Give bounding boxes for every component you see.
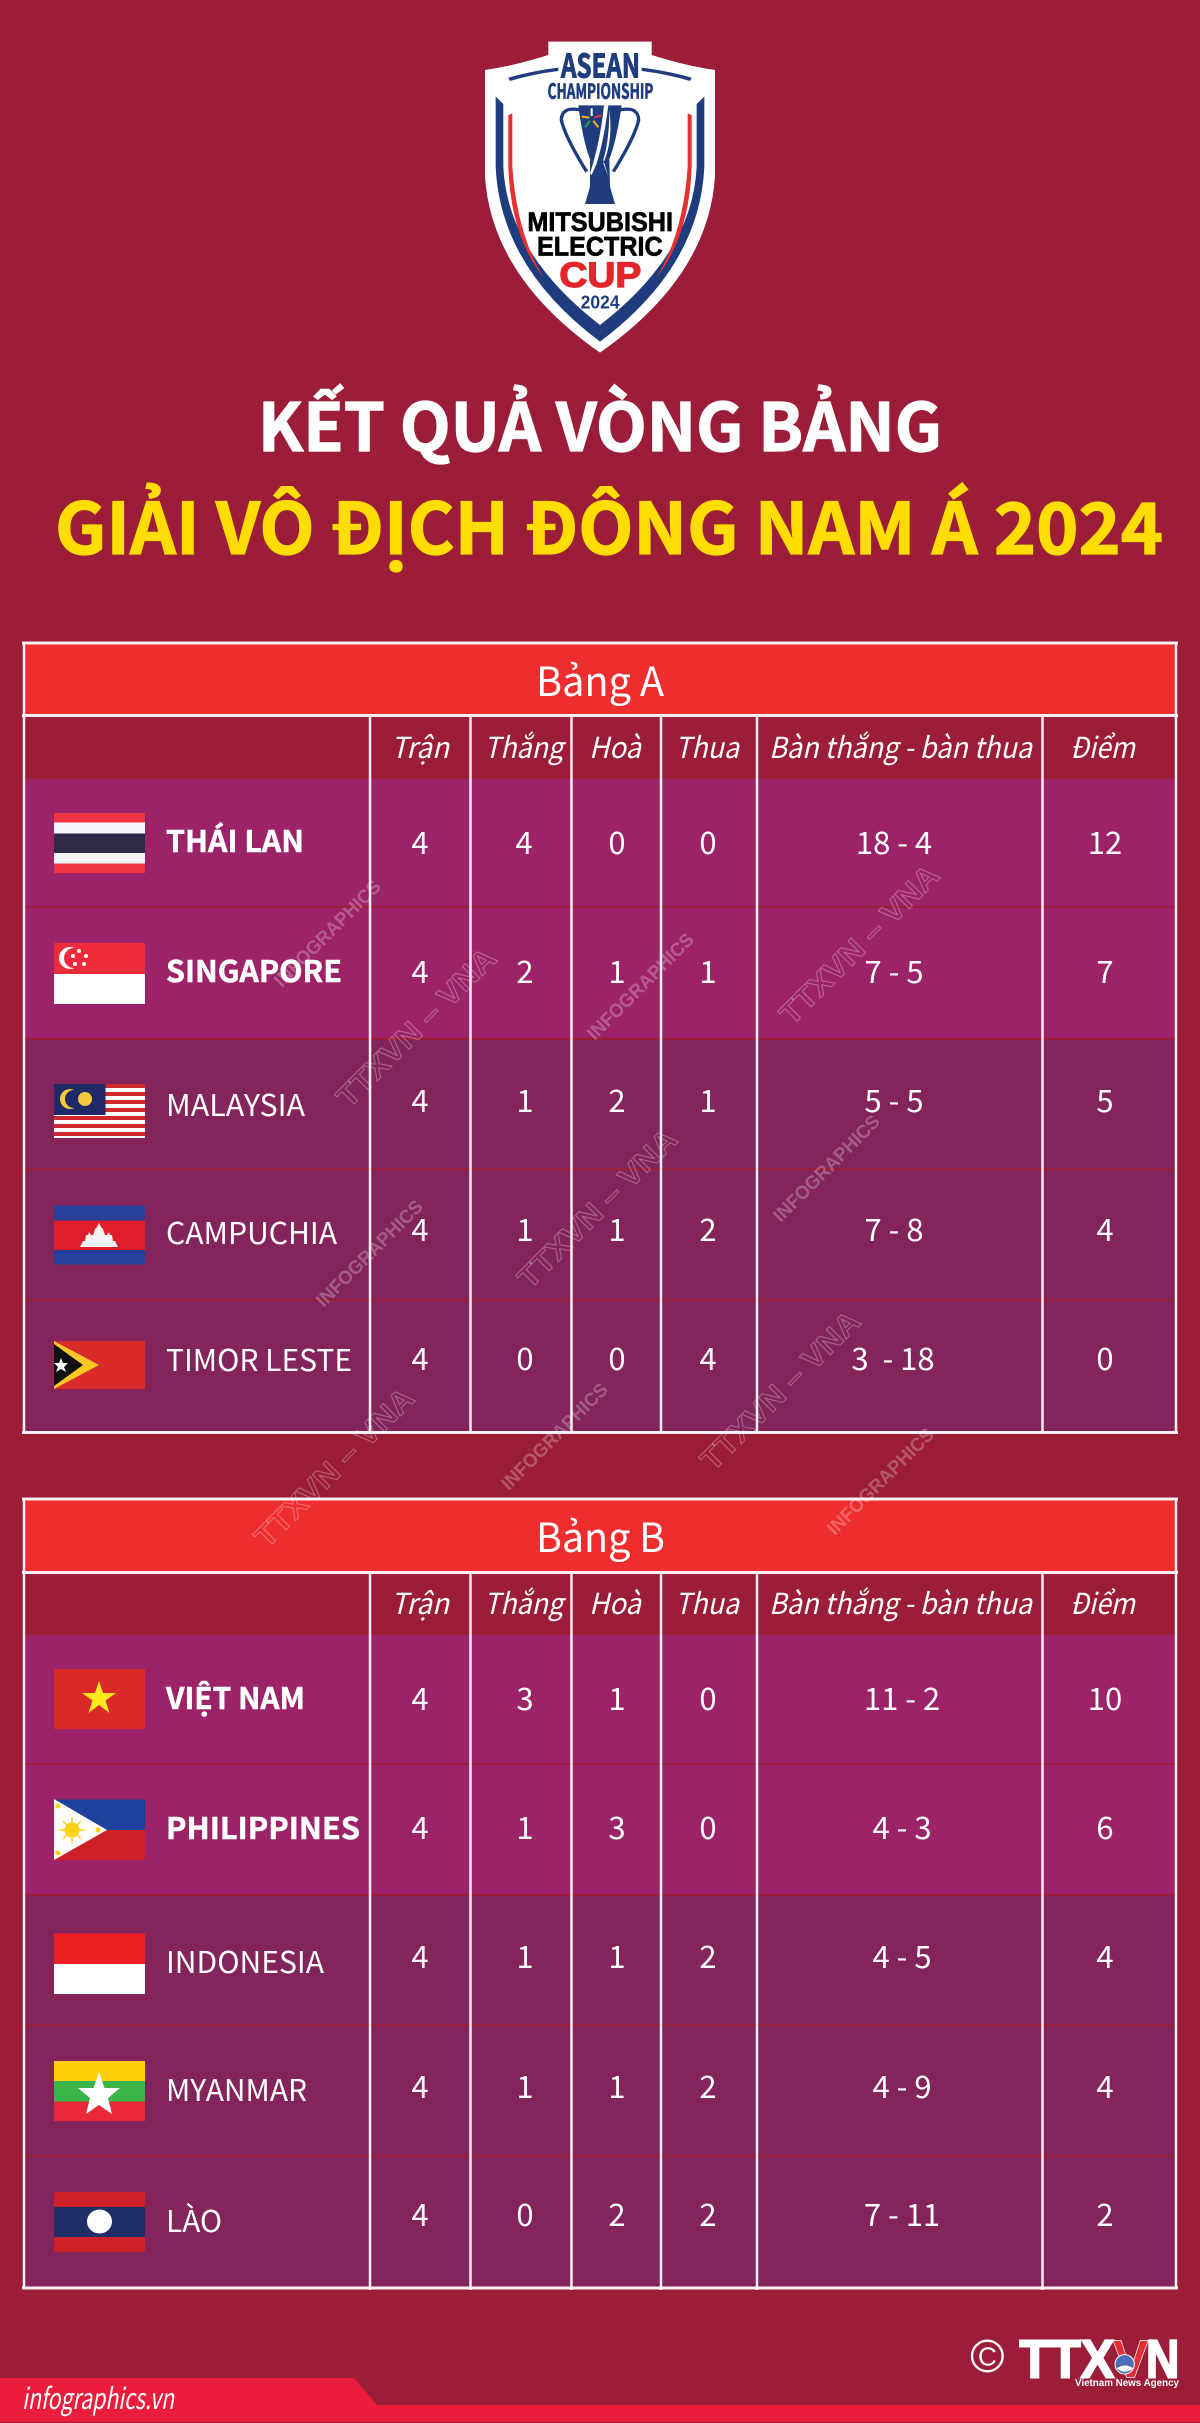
stats: 11 - 2 [864, 1674, 940, 1719]
stats [411, 1674, 1122, 1719]
stats: 2 [608, 2190, 626, 2235]
watermarks: TTXVN - VNA and INFOGRAPHICS [248, 859, 946, 1554]
stats: 4 - 9 [872, 2062, 932, 2107]
stats: 4 [411, 947, 429, 992]
title line 2: GIẢI VÔ ĐỊCH ĐÔNG NAM Á 2024 [55, 473, 1163, 575]
copyright icon and TTXVN logo: Vietnam News Agency [1075, 2378, 1179, 2389]
watermarks: TTXVN - VNA and INFOGRAPHICS: TTXVN – VNA [330, 942, 503, 1114]
copyright icon and TTXVN logo: TTX [1019, 2330, 1115, 2389]
stats: 10 [1088, 1674, 1122, 1719]
panel: Bảng B table [22, 1498, 1178, 2290]
flag: Thailand [54, 813, 145, 873]
stats: 7 - 8 [864, 1205, 924, 1250]
flag: Singapore [54, 943, 145, 1004]
watermarks: TTXVN - VNA and INFOGRAPHICS: INFOGRAPHICS [769, 1111, 885, 1227]
stats: 2 [699, 1205, 717, 1250]
stats: 0 [516, 1334, 534, 1379]
watermarks: TTXVN - VNA and INFOGRAPHICS: TTXVN – VNA [511, 1123, 684, 1295]
stats: 4 [411, 1803, 429, 1848]
stats: 18 - 4 [856, 818, 932, 863]
stats: 7 - 5 [864, 947, 924, 992]
stats: 6 [1096, 1803, 1114, 1848]
team name: CAMPUCHIA [166, 1209, 338, 1253]
title line 1: KẾT QUẢ VÒNG BẢNG [258, 375, 942, 471]
stats: 0 [1096, 1334, 1114, 1379]
stats: 1 [608, 1205, 626, 1250]
table header row B: Điểm [1070, 1581, 1136, 1623]
flag: Vietnam [54, 1669, 145, 1729]
footer: website: infographics.vn [22, 2376, 175, 2418]
stats [411, 947, 1114, 992]
team name: THÁI LAN [166, 817, 304, 861]
table header row B: Hoà [589, 1581, 643, 1623]
banner: Bảng B [24, 1499, 1176, 1572]
flag: Malaysia [54, 1084, 145, 1138]
team name: TIMOR LESTE [166, 1336, 352, 1380]
watermarks: TTXVN - VNA and INFOGRAPHICS: INFOGRAPHICS [270, 876, 386, 992]
stats: 1 [516, 2062, 534, 2107]
stats: 0 [608, 818, 626, 863]
stats: 2 [608, 1076, 626, 1121]
logo: ASEAN Championship Mitsubishi Electric Cup 2024 shield: MITSUBISHI [527, 207, 673, 237]
stats: 4 [411, 1674, 429, 1719]
stats: 5 - 5 [864, 1076, 924, 1121]
stats [411, 1334, 1114, 1379]
stats: 1 [516, 1076, 534, 1121]
team name: MYANMAR [166, 2066, 307, 2110]
table header row B: Bàn thắng - bàn thua [769, 1581, 1034, 1623]
stats: 0 [608, 1334, 626, 1379]
watermarks: TTXVN - VNA and INFOGRAPHICS: INFOGRAPHICS [823, 1424, 939, 1540]
logo: ASEAN Championship Mitsubishi Electric Cup 2024 shield: ELECTRIC [537, 231, 663, 261]
stats: 1 [516, 1803, 534, 1848]
banner: Bảng A [24, 643, 1176, 715]
stats: 4 [515, 818, 533, 863]
stats: 1 [608, 947, 626, 992]
stats: 4 [411, 2190, 429, 2235]
watermarks: TTXVN - VNA and INFOGRAPHICS: TTXVN – VNA [773, 859, 946, 1031]
stats: 1 [608, 1932, 626, 1977]
table header row B: Trận [391, 1581, 450, 1623]
stats: 1 [608, 1674, 626, 1719]
flag: Indonesia [54, 1934, 145, 1994]
stats [411, 1205, 1114, 1250]
flag: Myanmar [54, 2061, 145, 2121]
panel: Bảng A table [22, 642, 1178, 1434]
team name: LÀO [166, 2197, 222, 2241]
stats [411, 818, 1122, 863]
stats: 4 [411, 2062, 429, 2107]
stats: 0 [699, 818, 717, 863]
stats: 4 - 5 [872, 1932, 932, 1977]
watermarks: TTXVN - VNA and INFOGRAPHICS: INFOGRAPHICS [312, 1196, 428, 1312]
logo: ASEAN Championship Mitsubishi Electric Cup 2024 shield: 2024 [581, 291, 620, 312]
stats: 3 [608, 1803, 626, 1848]
stats: 2 [699, 1932, 717, 1977]
stats: 1 [516, 1205, 534, 1250]
row: Campuchia [24, 1169, 1176, 1300]
table header row A: Bàn thắng - bàn thua [769, 725, 1034, 767]
banner: Bảng B: Bảng B [536, 1506, 665, 1564]
logo: ASEAN Championship Mitsubishi Electric Cup 2024 shield: CHAMPIONSHIP [548, 75, 653, 104]
stats: 4 [1096, 1932, 1114, 1977]
stats: 4 [411, 1076, 429, 1121]
stats [411, 1932, 1114, 1977]
stats: 7 [1096, 947, 1114, 992]
stats [411, 2062, 1114, 2107]
team name: INDONESIA [166, 1938, 325, 1982]
row: Việt Nam [24, 1635, 1176, 1764]
stats: 2 [699, 2062, 717, 2107]
stats: 4 [411, 1932, 429, 1977]
stats: 0 [699, 1674, 717, 1719]
stats: 2 [699, 2190, 717, 2235]
team name: SINGAPORE [166, 947, 342, 991]
stats: 0 [516, 2190, 534, 2235]
stats: 2 [516, 947, 534, 992]
flag: Timor Leste [54, 1341, 145, 1389]
row: Lào [24, 2156, 1176, 2287]
table header row A [391, 725, 1136, 767]
flag: Laos [54, 2192, 145, 2252]
table header row B [391, 1581, 1136, 1623]
logo: ASEAN Championship Mitsubishi Electric Cup 2024 shield: ASEAN [560, 40, 640, 87]
stats: 1 [516, 1932, 534, 1977]
stats: 1 [699, 1076, 717, 1121]
flag: Philippines [54, 1799, 145, 1860]
logo: ASEAN Championship Mitsubishi Electric Cup 2024 shield: CUP [559, 256, 641, 295]
stats: 4 [411, 818, 429, 863]
row: Malaysia [24, 1039, 1176, 1169]
team name: VIỆT NAM [165, 1674, 305, 1718]
stats: 0 [699, 1803, 717, 1848]
watermarks: TTXVN - VNA and INFOGRAPHICS: INFOGRAPHICS [497, 1379, 613, 1495]
stats: 4 [411, 1205, 429, 1250]
table header row B: Thắng [484, 1581, 566, 1623]
stats: 4 [699, 1334, 717, 1379]
stats: 1 [608, 2062, 626, 2107]
row: Myanmar [24, 2025, 1176, 2156]
table header row A: Hoà [589, 725, 643, 767]
stats [411, 1803, 1114, 1848]
stats: 7 - 11 [864, 2190, 940, 2235]
watermarks: TTXVN - VNA and INFOGRAPHICS: TTXVN – VNA [248, 1382, 421, 1554]
stats: 3 - 18 [851, 1334, 935, 1379]
stats [411, 1076, 1114, 1121]
table header row A: Thắng [484, 725, 566, 767]
watermarks: TTXVN - VNA and INFOGRAPHICS: INFOGRAPHICS [583, 929, 699, 1045]
row: Indonesia [24, 1895, 1176, 2025]
row: Thái Lan [24, 779, 1176, 907]
watermarks: TTXVN - VNA and INFOGRAPHICS: TTXVN – VNA [694, 1305, 867, 1477]
stats: 4 - 3 [872, 1803, 932, 1848]
row: Timor Leste [24, 1300, 1176, 1432]
table header row A: Thua [675, 725, 741, 767]
stats: 5 [1096, 1076, 1114, 1121]
stats: 4 [1096, 1205, 1114, 1250]
footer: red band [0, 2378, 1200, 2422]
table header row A: Điểm [1070, 725, 1136, 767]
stats: 4 [411, 1334, 429, 1379]
banner: Bảng A: Bảng A [536, 650, 665, 708]
table header row B: Thua [675, 1581, 741, 1623]
stats: 4 [1096, 2062, 1114, 2107]
copyright icon and TTXVN logo [972, 2330, 1179, 2389]
stats: 12 [1088, 818, 1122, 863]
logo: ASEAN Championship Mitsubishi Electric Cup 2024 shield [485, 40, 715, 353]
team name: MALAYSIA [166, 1081, 306, 1125]
stats [411, 2190, 1114, 2235]
flag: Cambodia [54, 1206, 145, 1264]
copyright icon and TTXVN logo: N [1146, 2330, 1179, 2389]
row: Philippines [24, 1764, 1176, 1895]
stats: 2 [1096, 2190, 1114, 2235]
table header row A: Trận [391, 725, 450, 767]
copyright icon and TTXVN logo: V [1113, 2330, 1149, 2389]
stats: 1 [699, 947, 717, 992]
row: Singapore [24, 907, 1176, 1039]
team name: PHILIPPINES [166, 1804, 360, 1848]
stats: 3 [516, 1674, 534, 1719]
copyright icon and TTXVN logo: C [978, 2341, 997, 2371]
